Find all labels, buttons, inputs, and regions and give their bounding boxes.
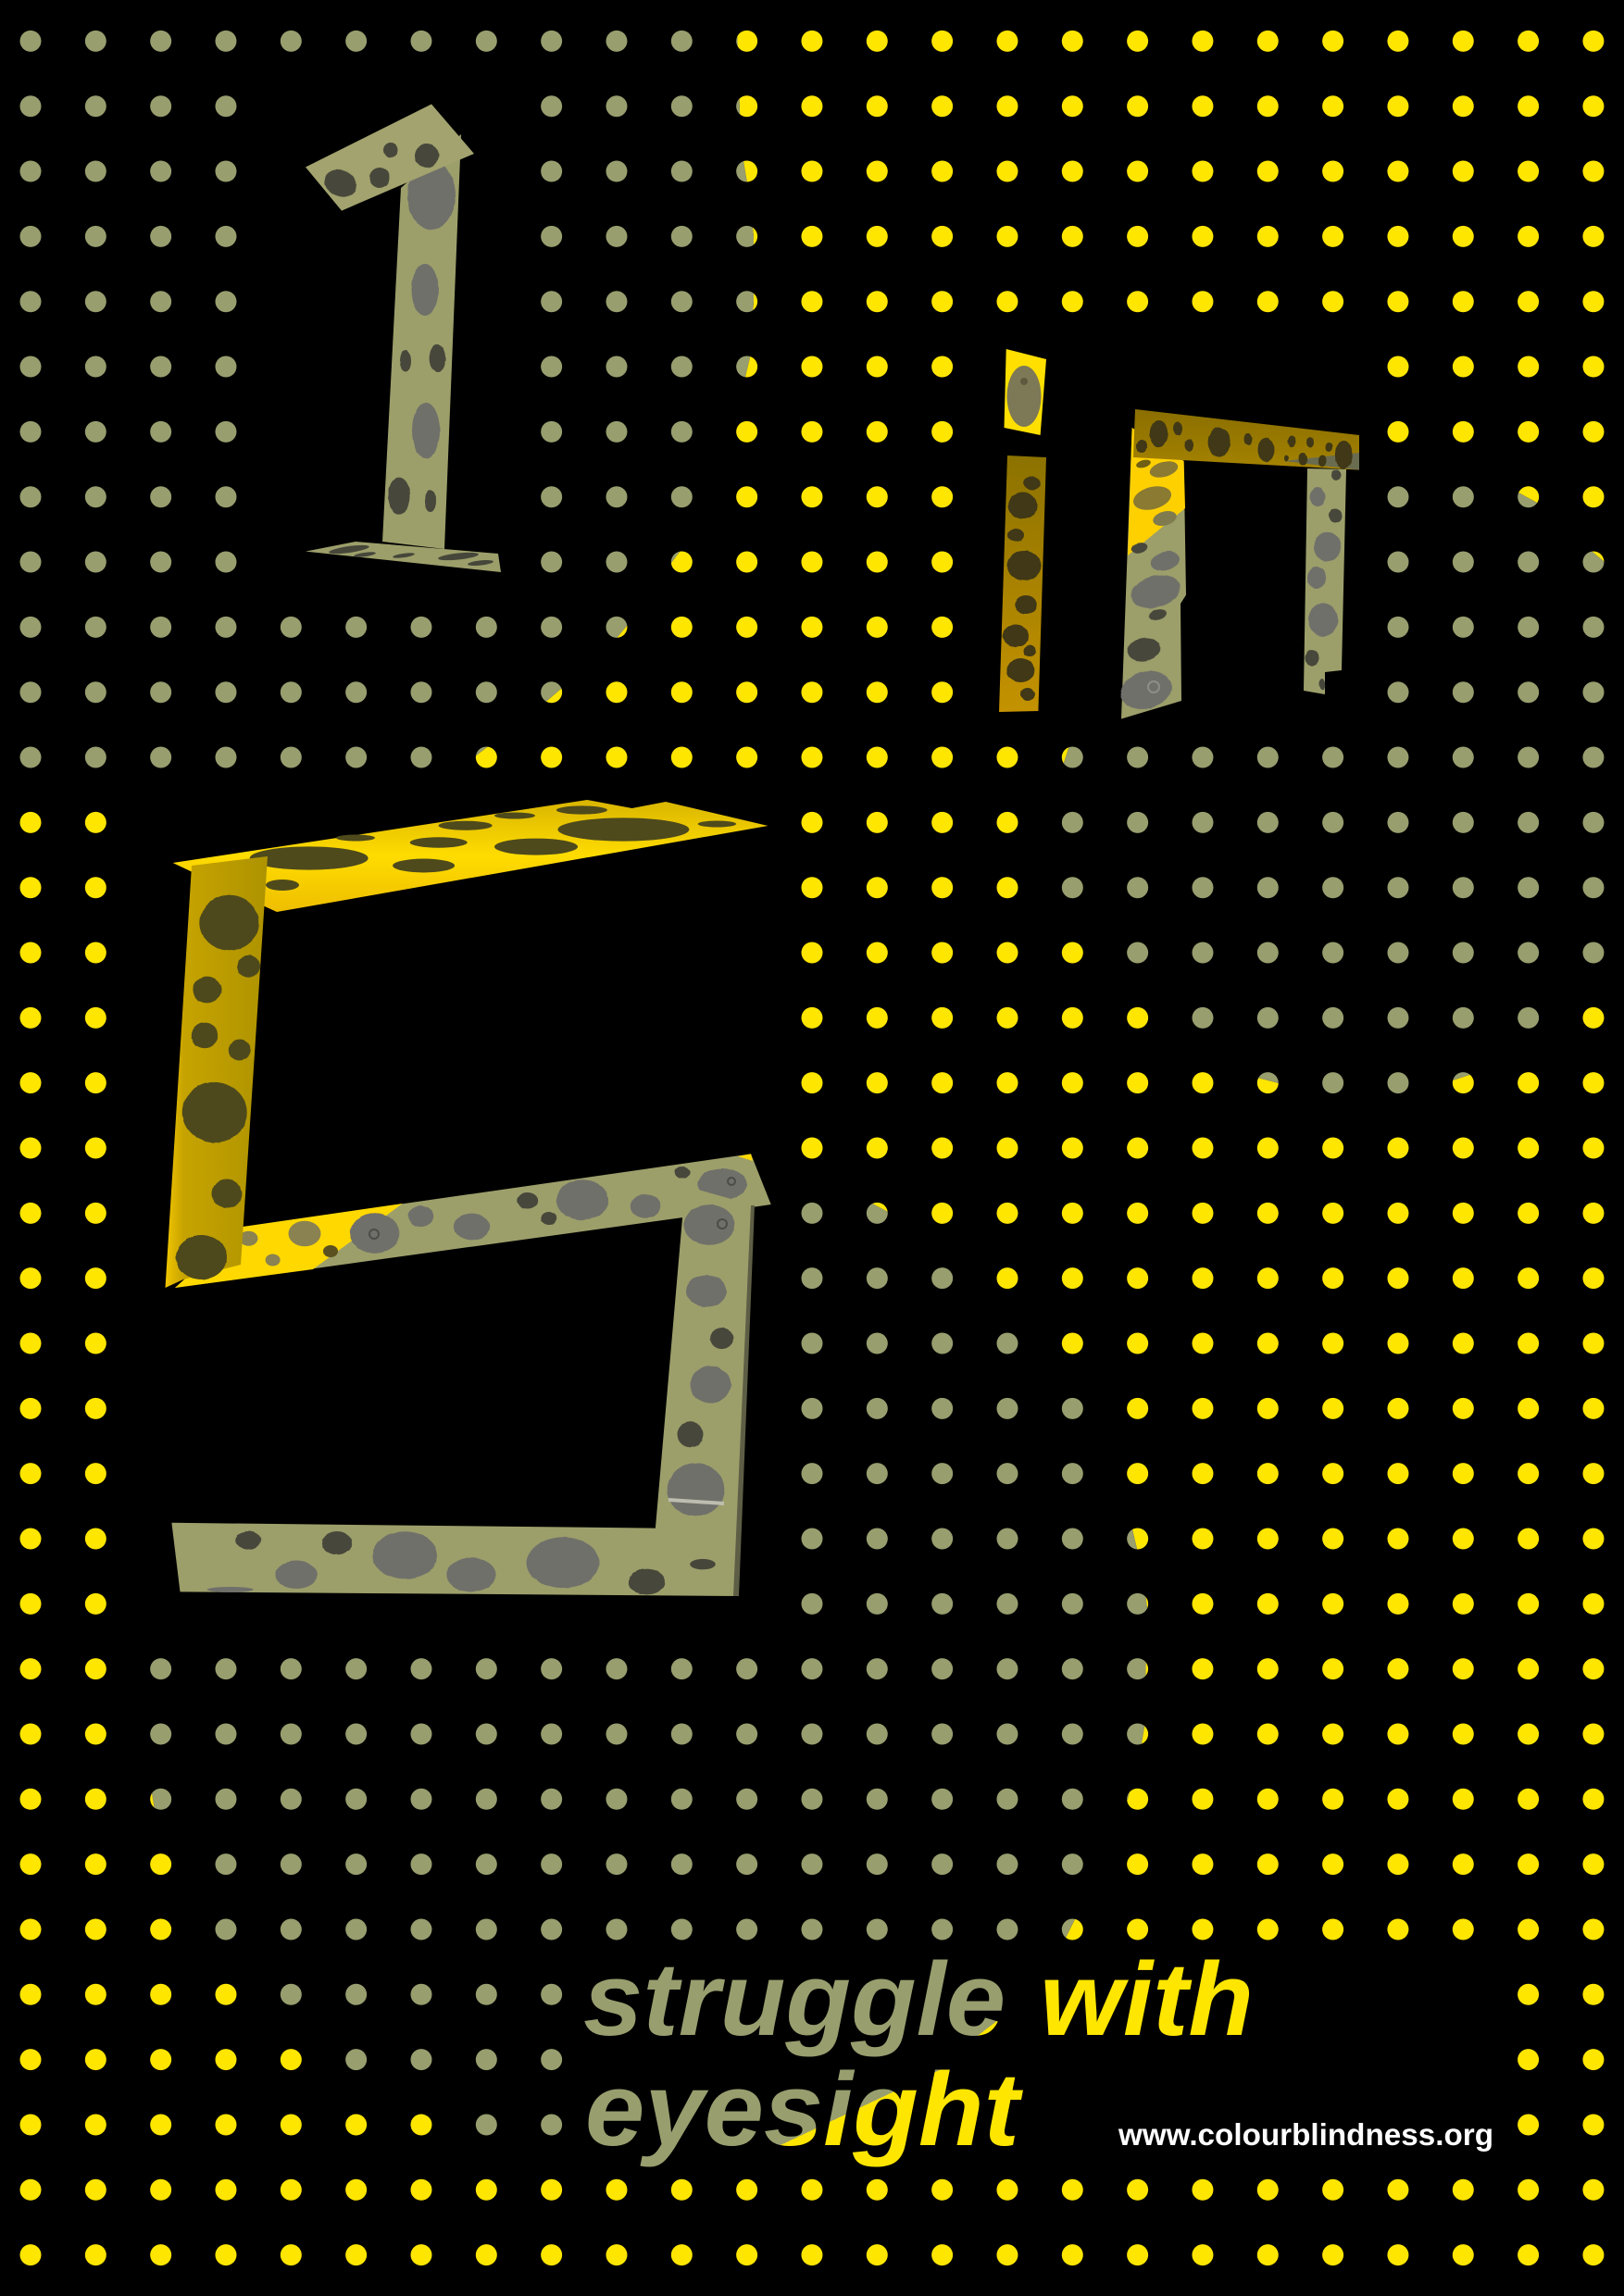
five: middle strip: [175, 1154, 771, 1288]
headline word: struggle: struggle: [583, 1941, 1006, 2057]
letter n: left stem, right stem and top bar: [1117, 409, 1359, 718]
five: slanted top strip: [173, 800, 768, 912]
headline word: with: with: [1040, 1941, 1254, 2057]
numeral one made of spotted strips: [306, 104, 501, 572]
headline: [583, 1941, 1254, 2167]
five: left stem: [165, 856, 268, 1288]
headline word: eyesight: eyesight: [585, 2052, 1024, 2167]
numeral five made of spotted strips: [165, 800, 771, 1596]
five: bottom strip: [171, 1523, 738, 1596]
website url: www.colourblindness.org: [1118, 2117, 1493, 2152]
letter i: dot and stem: [999, 349, 1046, 712]
five: right stem: [629, 1186, 755, 1596]
